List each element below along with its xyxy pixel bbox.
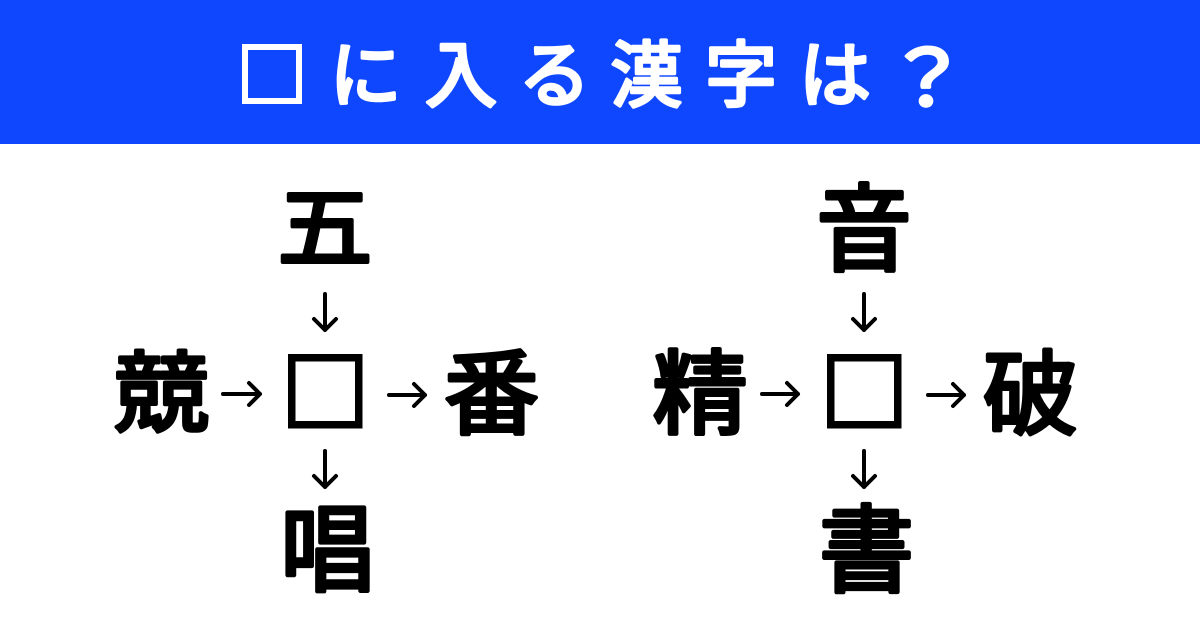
- arrow right left: [223, 383, 260, 405]
- bottom kanji: 書: [819, 499, 914, 605]
- arrow down top: [853, 294, 875, 330]
- title text: 字: [705, 37, 777, 117]
- top kanji: 五: [278, 181, 372, 279]
- arrow right right: [389, 384, 425, 406]
- title box glyph: [245, 47, 299, 101]
- title text: る: [518, 37, 591, 117]
- right kanji: 破: [983, 343, 1078, 447]
- left kanji: 競: [114, 346, 209, 444]
- bottom kanji: 唱: [280, 498, 375, 604]
- puzzle left: [114, 181, 539, 605]
- arrow right right: [928, 384, 964, 406]
- arrow down bottom: [853, 451, 875, 487]
- title banner: [0, 0, 1200, 144]
- arrow down top: [314, 294, 336, 330]
- title text: は: [799, 37, 871, 117]
- title text: ？: [885, 37, 969, 122]
- left kanji: 精: [653, 343, 747, 446]
- title text: に: [329, 37, 402, 117]
- title text: [329, 37, 969, 122]
- arrow down bottom: [314, 451, 336, 487]
- title text: 漢: [610, 37, 683, 117]
- title text: 入: [425, 37, 497, 117]
- top kanji: 音: [816, 178, 912, 284]
- center box: [292, 358, 359, 425]
- arrow right left: [762, 383, 798, 405]
- center box: [831, 358, 898, 425]
- right kanji: 番: [444, 343, 539, 446]
- puzzle right: [653, 178, 1078, 605]
